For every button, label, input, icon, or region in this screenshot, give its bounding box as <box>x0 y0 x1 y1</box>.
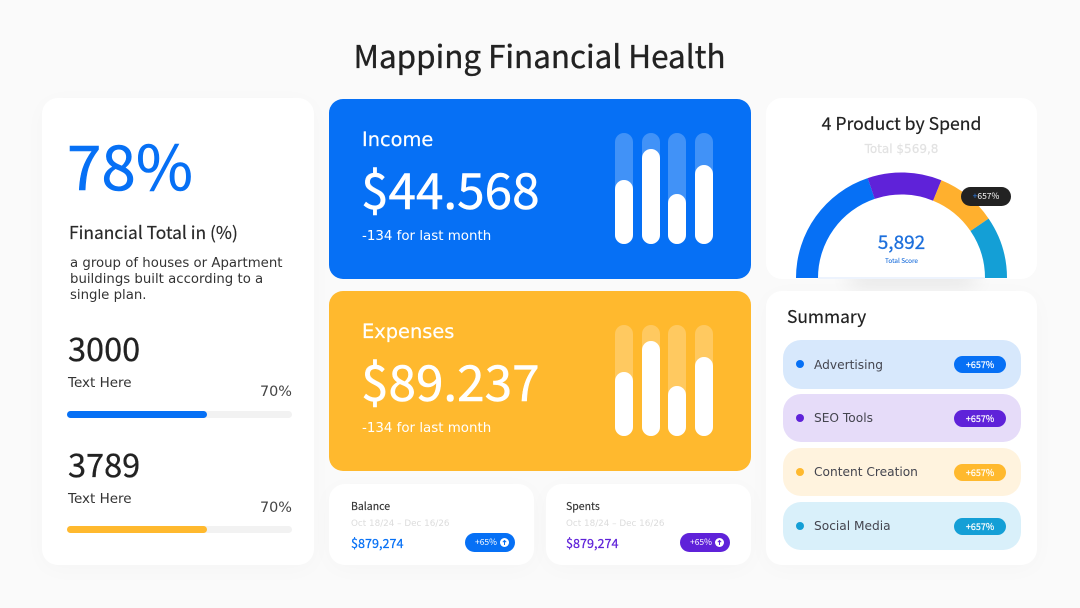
metric two: 70% <box>260 500 292 516</box>
gauge tooltip: +657% <box>973 190 999 202</box>
description: a group of houses or Apartment <box>70 256 282 271</box>
metric two: 3789 <box>68 440 140 487</box>
row: content creation: +657% <box>966 466 994 478</box>
metric two: Text Here <box>68 491 132 507</box>
panel heading: Summary <box>787 304 866 329</box>
row: advertising: +657% <box>966 358 994 371</box>
balance pill: +65% <box>475 536 497 548</box>
expenses value: $89.237 <box>361 345 540 416</box>
spents pill <box>680 533 730 552</box>
description <box>70 256 282 303</box>
total label: Total $569,8 <box>865 142 938 156</box>
row: content creation <box>783 448 1021 496</box>
big percentage: 78% <box>67 118 193 208</box>
row: social media <box>783 502 1021 550</box>
income note: -134 for last month <box>362 229 491 244</box>
metric one: Text Here <box>68 375 132 391</box>
balance value: $879,274 <box>351 533 403 552</box>
spents value: $879,274 <box>566 533 618 552</box>
panel heading: 4 Product by Spend <box>822 111 981 136</box>
metric one <box>67 324 292 418</box>
row: seo tools: SEO Tools <box>814 411 873 425</box>
metric one: 70% <box>260 384 292 400</box>
row: seo tools: +657% <box>966 412 994 424</box>
description: buildings built according to a <box>70 272 263 287</box>
expenses bar chart <box>615 325 713 436</box>
balance dates: Oct 18/24 – Dec 16/26 <box>351 519 450 529</box>
panel: financial total <box>42 98 314 565</box>
balance pill <box>465 533 515 552</box>
row: advertising <box>783 340 1021 388</box>
expenses note: -134 for last month <box>362 421 491 436</box>
gauge chart <box>796 172 1007 278</box>
spents label: Spents <box>566 499 600 514</box>
shadow under gauge <box>854 279 972 288</box>
expenses label: Expenses <box>362 320 454 343</box>
gauge score: 5,892 <box>878 228 925 255</box>
panel: summary <box>766 291 1037 565</box>
panel: product by spend <box>766 98 1037 279</box>
spents dates: Oct 18/24 – Dec 16/26 <box>566 519 665 529</box>
panel: expenses <box>329 291 751 471</box>
row: seo tools <box>783 394 1021 442</box>
income bar chart <box>615 133 713 244</box>
income value: $44.568 <box>361 153 540 224</box>
metric one: 3000 <box>68 324 140 371</box>
balance label: Balance <box>351 499 390 514</box>
row: advertising: Advertising <box>814 358 883 372</box>
panel: balance <box>329 484 534 565</box>
row: social media: Social Media <box>814 519 891 533</box>
row: social media: +657% <box>966 520 994 532</box>
metric two <box>67 440 292 533</box>
income label: Income <box>362 128 433 151</box>
panel: income <box>329 99 751 279</box>
title: Mapping Financial Health <box>353 33 726 78</box>
gauge score: Total Score <box>885 256 918 265</box>
panel: spents <box>546 484 751 565</box>
spents pill: +65% <box>690 536 712 548</box>
row: content creation: Content Creation <box>814 465 918 479</box>
panel heading: Financial Total in (%) <box>69 220 238 245</box>
description: single plan. <box>70 288 147 303</box>
gauge tooltip <box>961 187 1011 206</box>
